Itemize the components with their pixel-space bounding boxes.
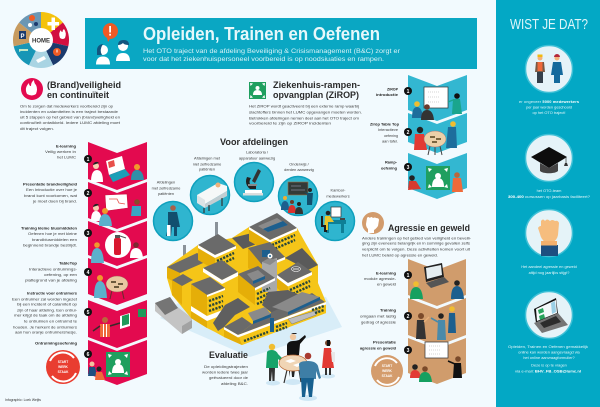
step numbers: 2 (87, 191, 90, 197)
section: agressie en geweld intro: verplicht om te volgen. Deze activiteiten komen voort uit (362, 246, 471, 252)
fact: agressie (521, 210, 577, 275)
fact: aanvragen en contact: het online aanvraagformulier? (523, 355, 576, 360)
block: back left (167, 253, 210, 285)
text: brand step labels: oefening, op een (44, 272, 77, 277)
icon: two people with alert bubble (96, 23, 130, 64)
section: brandveiligheid intro (20, 78, 121, 131)
text: brand step labels (12, 144, 78, 346)
block: back right (285, 248, 318, 270)
illustration: ontruimer (93, 309, 146, 337)
fact: agressie: Het aandeel agressie en geweld (521, 264, 577, 269)
block: small left (172, 274, 193, 305)
meeting table (279, 355, 307, 383)
step numbers: 1 (407, 273, 410, 279)
icon: home wheel: HOME (32, 38, 50, 44)
text: agressie step labels: omgaan met lastig (360, 314, 396, 318)
section: brandveiligheid intro: uit 5 stappen op het gebied van (brand)veiligheid en (20, 114, 120, 120)
text: zirop step labels (370, 86, 400, 170)
fact: aanvragen en contact: Opleiden, Trainen en Oefenen gemakkelijk (508, 344, 588, 349)
yellow mass (167, 227, 326, 345)
text: brand step labels: Een Introductie over hoe je (26, 187, 77, 192)
text: brand step labels: aan hun oranje ontruimershesje. (15, 330, 77, 334)
section: evaluatie text: Evaluatie (209, 350, 248, 360)
fact: medewerkers: per jaar worden geschoold (526, 104, 572, 110)
text: zirop step labels: aan tafel. (382, 138, 398, 144)
section: ziekenhuis-rampenopvangplan intro (249, 80, 362, 126)
section: brandveiligheid intro: Om te zorgen dat medewerkers voorbereid zijn op (20, 104, 113, 108)
block: dark roof centre (232, 233, 262, 249)
circle: zelfredzame patienten (152, 180, 192, 240)
section: agressie en geweld intro: het LUMC beleid op agressie en geweld. (362, 252, 438, 258)
block: top right (249, 213, 297, 253)
text: brand step labels: het LUMC (57, 154, 76, 160)
fact: aanvragen en contact: online kan worden aangevraagd via (518, 350, 581, 354)
step numbers: 2 (407, 130, 410, 136)
fact: opleidingen (508, 134, 591, 199)
text: brand step labels: bij een incident of calamiteit op (17, 302, 77, 306)
person: green (266, 344, 284, 381)
badge: rood oefening: START (58, 360, 68, 364)
block: front left (191, 277, 225, 328)
person: black (287, 333, 306, 377)
fact: opleidingen: 300-400 cursussen op jaarbasis faciliteert? (508, 194, 591, 199)
circle: niet zelfredzame patienten: niet zelfredzame (193, 162, 221, 166)
annex (155, 297, 192, 334)
circle: zelfredzame patienten: Afdelingen (157, 180, 175, 184)
illustration: laptop e-learning (410, 263, 464, 299)
text: agressie step labels: agressie en geweld (360, 346, 397, 350)
illustration: hospital building (155, 213, 342, 357)
title: Opleiden, Trainen en Oefenen (143, 24, 380, 44)
step numbers (404, 271, 412, 354)
badge: rood oefening: WERK (58, 365, 69, 369)
fact: aanvragen en contact: via e-mail: BHV_FB_OSB@lumc.nl (515, 368, 581, 374)
block: helipad (277, 262, 312, 297)
step numbers: 6 (87, 352, 90, 358)
credit: Infographic: Loek Weijts (5, 398, 41, 402)
circle: kantoor: medewerkers (326, 194, 350, 198)
section: evaluatie text: De opleidingstrajecten (204, 364, 248, 369)
text: brand step labels: te ontruimen en ontruimd te (24, 318, 77, 324)
text: zirop step labels: Ziròp Table Top (370, 122, 400, 126)
chimneys (183, 222, 218, 267)
badge: tan oefening: WERK (382, 369, 393, 373)
illustration: rampoefening (408, 166, 463, 192)
illustration: presentatie agressie (410, 342, 462, 382)
step numbers (84, 155, 92, 358)
circle: kantoor (316, 188, 354, 240)
fact: medewerkers: op het OTO traject! (532, 110, 566, 115)
badge: tan oefening (371, 355, 403, 387)
circle: laboratoria: Laboratoria / (246, 150, 269, 154)
illustration: e-learning (91, 156, 144, 182)
text: zirop step labels: oefening (381, 166, 398, 170)
icon: home wheel (13, 12, 69, 68)
circle: kantoor: Kantoor- (331, 188, 346, 192)
block: mid (238, 266, 275, 305)
section: ziekenhuis-rampenopvangplan intro: opvangplan (ZiROP) (273, 90, 359, 100)
text: brand step labels: Interactieve ontruimings- (29, 266, 78, 272)
text: zirop step labels: introductie (376, 92, 399, 97)
text: brand step labels: brand kunt voorkomen, wat (24, 193, 78, 198)
section: evaluatie text: geëvalueerd door de (209, 375, 248, 380)
section: brandveiligheid intro: en continuïteit (47, 90, 109, 100)
step numbers: 5 (87, 310, 90, 316)
text: agressie step labels: gedrag of agressie (361, 320, 396, 324)
text: brand step labels: je moet doen bij brand. (32, 198, 77, 204)
chart: tan chevron steps (404, 259, 466, 384)
badge: rood oefening (46, 350, 80, 384)
badge: tan oefening: STAAK (382, 374, 393, 378)
block: centre white (203, 260, 238, 284)
circle: onderwijs (278, 162, 318, 216)
icon: home wheel: P (20, 34, 25, 40)
section: ziekenhuis-rampenopvangplan intro: Betrokken afdelingen nemen deel aan het OTO traject om (249, 116, 359, 120)
circle: niet zelfredzame patienten: Afdelingen met (194, 156, 221, 160)
circle: onderwijs: Onderwijs / (289, 162, 310, 166)
section: brandveiligheid intro: dit traject volgen. (20, 126, 54, 131)
text: brand step labels: Oefenen hoe je met kleine (28, 231, 77, 236)
person: red dress (322, 340, 335, 375)
text: brand step labels: zijn of haar afdeling. Een ontrui- (17, 308, 78, 312)
step numbers: 3 (407, 165, 410, 171)
text: agressie step labels: module agressie- (364, 276, 397, 281)
block: central dark courtyard (213, 290, 305, 331)
chart: blue chevron steps (404, 75, 467, 199)
badge: rood oefening: STAAK (58, 370, 69, 374)
illustration: evaluation team around table (266, 333, 335, 401)
panel: header banner (85, 18, 477, 69)
section: agressie en geweld intro: Agressie en geweld (388, 223, 470, 233)
chart: red chevron steps (84, 142, 147, 385)
section: brandveiligheid intro: (Brand)veiligheid (47, 80, 121, 90)
text: brand step labels: Veilig werken in (45, 149, 76, 154)
long front wing (224, 292, 326, 345)
fact: agressie: altijd nog jaarlijks stijgt? (529, 270, 570, 275)
section: evaluatie text: afdeling B&C. (221, 381, 248, 386)
text: agressie step labels: Presentatie (373, 340, 397, 344)
section: agressie en geweld intro: ging zijn eveneens belangrijk en in sommige gevallen zelfs (362, 240, 470, 246)
step numbers (404, 87, 412, 171)
step numbers: 2 (407, 314, 410, 320)
fact: medewerkers: er ongeveer 5000 medewerkers (519, 99, 579, 104)
circle: zelfredzame patienten: met zelfredzame (152, 186, 180, 190)
circle: laboratoria: apparatuur aanwezig (239, 156, 275, 160)
text: brand step labels: Ontruimingsoefening (35, 340, 78, 346)
section: ziekenhuis-rampenopvangplan intro: Het ZiROP wordt geactiveerd bij een externe ramp waarbij (249, 104, 359, 108)
text: agressie step labels: en geweld (377, 282, 396, 286)
stair tower (262, 250, 277, 292)
illustration: tabletop (94, 275, 128, 299)
fact: aanvragen en contact: Deze is op te vragen (531, 362, 567, 368)
heading: voor afdelingen: Voor afdelingen (220, 137, 288, 147)
section: evaluatie text: worden iedere twee jaar (202, 370, 249, 374)
text: zirop step labels: Interactieve (378, 127, 398, 132)
text: brand step labels: TableTop (59, 260, 78, 266)
text: brand step labels: beginnend brandje bestrijdt. (23, 242, 77, 248)
text: zirop step labels: Ramp- (385, 160, 398, 164)
fact: medewerkers (519, 46, 579, 115)
section: ziekenhuis-rampenopvangplan intro: Ziekenhuis-rampen- (273, 80, 360, 90)
subtitle: voor dat het ziekenhuispersoneel voorbereid is op noodsiuaties en rampen. (143, 56, 384, 63)
step numbers: 3 (407, 348, 410, 354)
section: ziekenhuis-rampenopvangplan intro: slachtoffers binnen het LUMC opgevangen moeten worden. (249, 110, 362, 114)
illustration: blusser (91, 232, 143, 263)
text: zirop step labels: ZiROP (387, 86, 398, 92)
subtitle (143, 48, 401, 63)
step numbers: 4 (87, 270, 90, 276)
text: brand step labels: brandblusmiddelen een (32, 237, 77, 242)
text: brand step labels: Instructie voor ontruimers (27, 290, 77, 296)
circle: zelfredzame patienten: patiënten (158, 191, 174, 196)
section: evaluatie text (202, 350, 249, 386)
panel: wist je dat sidebar (496, 0, 600, 407)
text: brand step labels: houden. Je herkent de ontruimers (13, 324, 77, 330)
text: agressie step labels (360, 270, 397, 350)
circle: laboratoria (234, 150, 275, 202)
illustration: zirop tabletop (414, 121, 457, 155)
block: top tower (198, 234, 236, 270)
text: agressie step labels: Training (380, 308, 397, 312)
text: brand step labels: Een ontruimer zal worden ingezet (12, 296, 78, 302)
circle: niet zelfredzame patienten: patiënten (199, 166, 215, 172)
illustration: presentatie (91, 194, 141, 226)
text: agressie step labels: E-learning (376, 270, 397, 276)
step numbers: 1 (407, 89, 410, 95)
circle: onderwijs: derden aanwezig (284, 167, 314, 172)
fact: aanvragen en contact (508, 292, 588, 374)
illustration: ontruimingsoefening (88, 352, 130, 380)
block: blue roof tower (248, 242, 285, 278)
step numbers: 1 (87, 157, 90, 163)
illustration: training conflict (416, 306, 456, 340)
circle: niet zelfredzame patienten (190, 156, 230, 214)
text: brand step labels: Presentatie brandveiligheid (23, 182, 78, 186)
illustration: zirop introductie (412, 87, 462, 120)
badge: tan oefening: START (382, 364, 392, 368)
section: agressie en geweld intro (362, 212, 472, 258)
fact: opleidingen: het OTO-team (537, 188, 561, 193)
text: brand step labels: E-learning (56, 144, 77, 148)
step numbers: 3 (87, 231, 90, 237)
text: brand step labels: plattegrond van je afdeling (25, 278, 77, 282)
text: brand step labels: mer krijgt de taak om de afdeling (14, 312, 77, 318)
section: ziekenhuis-rampenopvangplan intro: voorbereid te zijn op ZiROP incidenten (249, 120, 331, 126)
section: brandveiligheid intro: incidenten en calamiteiten is een traject bestaande (20, 109, 118, 114)
subtitle: Het OTO traject van de afdeling Beveiliging & Crisismanagement (B&C) zorgt er (143, 48, 401, 55)
text: brand step labels: Training kleine blusmiddelen (21, 226, 78, 230)
section: brandveiligheid intro: continuïteit ontwikkeld. Iedere LUMC afdeling moet (20, 120, 121, 125)
person: blue (299, 353, 321, 397)
section: agressie en geweld intro: Andere trainingen op het gebied van veiligheid en beveili- (362, 236, 472, 240)
text: zirop step labels: oefening (384, 133, 398, 138)
